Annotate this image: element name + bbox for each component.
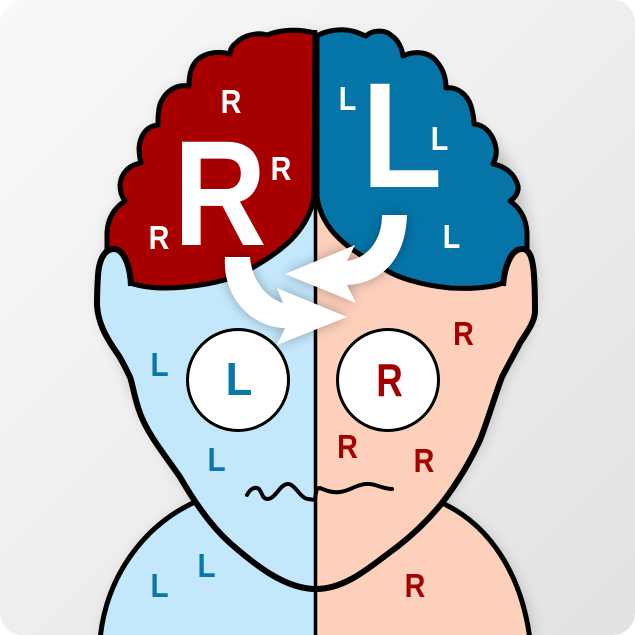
small white letters in blue hemisphere xyxy=(339,80,460,255)
brain: left hemisphere in blue (right side of image) xyxy=(317,30,527,288)
right eye: R xyxy=(376,354,403,406)
red letters on right side of body: R xyxy=(453,315,474,352)
head outline xyxy=(97,305,535,589)
small white letters in red hemisphere: R xyxy=(271,150,291,187)
right eye xyxy=(338,330,438,430)
blue letters on left side of body: L xyxy=(197,548,216,584)
big L in blue hemisphere: L xyxy=(362,51,442,219)
arrow: red hemisphere to right visual field xyxy=(225,257,347,345)
red letters on right side of body: R xyxy=(405,567,425,604)
mouth xyxy=(247,484,392,500)
head xyxy=(96,190,535,589)
arrow: blue hemisphere to left visual field xyxy=(285,215,407,303)
small white letters in red hemisphere: R xyxy=(149,219,169,256)
red letters on right side of body: R xyxy=(337,428,358,465)
small white letters in blue hemisphere: L xyxy=(339,80,356,117)
brain: right hemisphere in red (left side of image) xyxy=(107,30,315,288)
blue letters on left side of body: L xyxy=(207,442,226,478)
arrow shadows xyxy=(225,215,407,345)
right ear xyxy=(503,249,535,313)
red letters on right side of body xyxy=(337,315,474,604)
left ear xyxy=(97,249,131,307)
left eye: L xyxy=(226,353,252,405)
left eye xyxy=(188,330,288,430)
blue letters on left side of body: L xyxy=(150,347,169,383)
center divider line xyxy=(314,30,317,635)
big R in red hemisphere: R xyxy=(173,109,267,277)
small white letters in blue hemisphere: L xyxy=(443,218,460,255)
blue letters on left side of body: L xyxy=(150,568,169,604)
small white letters in red hemisphere: R xyxy=(221,83,241,120)
small white letters in blue hemisphere: L xyxy=(431,120,448,157)
small white letters in red hemisphere xyxy=(149,83,291,256)
shoulders xyxy=(100,502,530,635)
red letters on right side of body: R xyxy=(414,442,434,479)
figure shadow xyxy=(99,34,536,635)
blue letters on left side of body xyxy=(150,347,226,604)
